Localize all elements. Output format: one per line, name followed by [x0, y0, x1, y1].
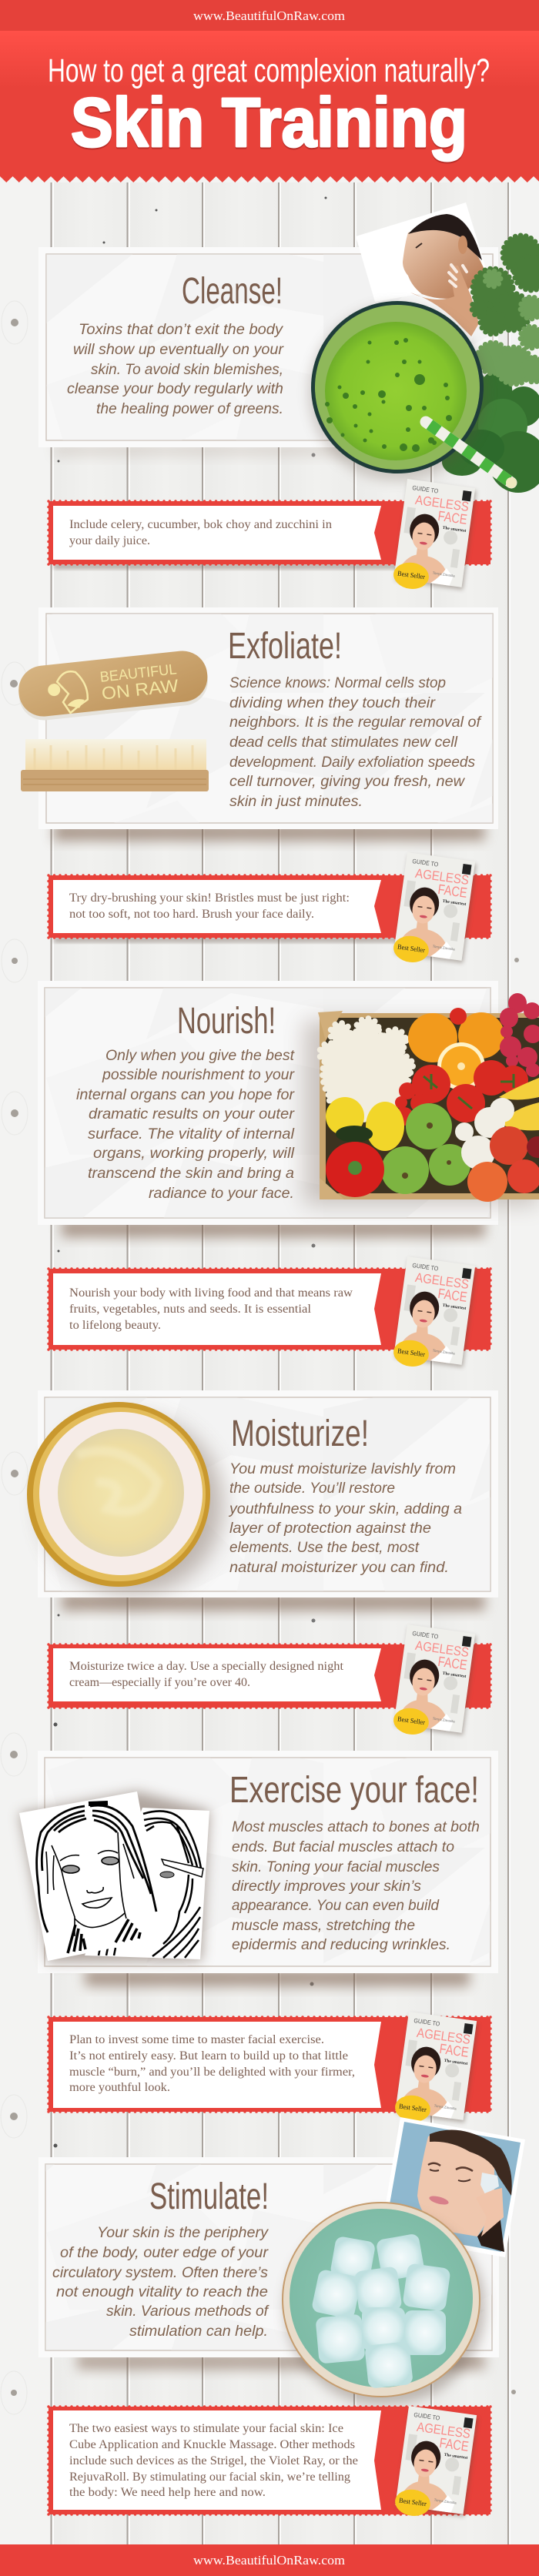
book cover: Tonya Zavasta — [432, 1349, 456, 1356]
tip text: Nourish your body with living food and that means raw — [69, 1286, 353, 1300]
tip text — [69, 1286, 353, 1332]
apples — [381, 1103, 470, 1194]
book cover: Best Seller — [399, 2102, 427, 2113]
body text: dead cells that stimulates new cell — [229, 734, 458, 751]
book cover: Best Seller — [397, 942, 426, 954]
tip text: Plan to invest some time to master facial exercise. — [69, 2033, 324, 2046]
book cover: AGELESS — [416, 2420, 471, 2441]
book cover — [392, 1624, 477, 1741]
book cover: AGELESS — [414, 866, 470, 888]
callout: stimulate tip — [49, 2406, 490, 2523]
book cover: GUIDE TO — [413, 2411, 440, 2422]
tip text — [69, 892, 350, 921]
body text: ends. But facial muscles attach to — [232, 1839, 454, 1855]
heading: Moisturize! — [231, 1413, 369, 1454]
book cover: The smartest — [442, 526, 467, 534]
tip text: include such devices as the Strigel, the Violet Ray, or the — [69, 2454, 358, 2467]
book cover: Tonya Zavasta — [434, 2498, 457, 2505]
body text: not enough vitality to reach the — [56, 2284, 268, 2300]
book cover: Best Seller — [397, 1347, 426, 1358]
tip text — [69, 2422, 358, 2499]
body text: skin in just minutes. — [229, 794, 363, 810]
body text: directly improves your skin’s — [232, 1878, 422, 1895]
panel: moisturize — [27, 1390, 498, 1611]
panel: exercise your face — [19, 1751, 498, 1986]
green smoothie glass with straw — [309, 301, 517, 488]
body text — [52, 2225, 270, 2340]
tip text: cream—especially if you’re over 40. — [69, 1676, 250, 1689]
body text: You must moisturize lavishly from — [229, 1461, 456, 1477]
tip text: Include celery, cucumber, bok choy and zucchini in — [69, 518, 332, 531]
callout: exfoliate tip — [49, 852, 490, 969]
tomatoes and strawberries — [395, 1008, 528, 1126]
body text — [228, 1461, 462, 1576]
oranges — [408, 1012, 504, 1090]
icon: brush side with bristles — [21, 739, 209, 791]
icon: wooden brush top with logo — [16, 648, 210, 723]
book cover: GUIDE TO — [412, 1630, 439, 1641]
book cover: The smartest — [442, 1303, 467, 1311]
body text — [232, 1819, 480, 1953]
top url bar — [0, 0, 539, 31]
tip text: Cube Application and Knuckle Massage. Other methods — [69, 2438, 355, 2451]
book cover: Best Seller — [397, 569, 426, 580]
book cover — [392, 479, 477, 596]
tip text: RejuvaRoll. By stimulating our facial skin, we’re telling — [69, 2471, 350, 2484]
book cover: Tonya Zavasta — [434, 2104, 457, 2111]
body text: the healing power of greens. — [96, 401, 283, 417]
tip text: to lifelong beauty. — [69, 1319, 161, 1332]
body text: transcend the skin and bring a — [88, 1166, 294, 1182]
book cover: FACE — [437, 882, 468, 901]
mushrooms — [455, 1098, 514, 1169]
body text: elements. Use the best, most — [229, 1540, 420, 1556]
body text: radiance to your face. — [149, 1186, 294, 1202]
body text: circulatory system. Often there’s — [52, 2265, 269, 2281]
book cover: AGELESS — [414, 1638, 470, 1660]
body text: stimulation can help. — [129, 2323, 268, 2340]
radishes — [500, 993, 539, 1077]
book cover: GUIDE TO — [412, 1262, 439, 1273]
body text: cell turnover, giving you fresh, new — [229, 774, 465, 790]
body text: internal organs can you hope for — [76, 1087, 295, 1103]
body text: Most muscles attach to bones at both — [232, 1819, 480, 1835]
nectarines — [467, 1126, 539, 1202]
book cover: The smartest — [442, 899, 467, 907]
callout: nourish tip — [49, 1256, 490, 1373]
book cover: FACE — [437, 508, 468, 527]
book cover: AGELESS — [414, 1270, 470, 1292]
tip text: the body: We need help here and now. — [69, 2486, 266, 2499]
bananas — [499, 1078, 539, 1130]
lemons — [326, 1097, 404, 1151]
heading: Cleanse! — [182, 271, 283, 312]
book cover: Tonya Zavasta — [432, 571, 456, 578]
book cover: The smartest — [442, 1671, 467, 1679]
callout: exercise tip — [49, 2012, 490, 2129]
icon: wooden brush top with logo: ON RAW — [101, 675, 179, 704]
tip text: Moisturize twice a day. Use a specially designed night — [69, 1660, 344, 1673]
body text — [229, 675, 482, 810]
book cover: Tonya Zavasta — [432, 1717, 456, 1724]
tip text: The two easiest ways to stimulate your facial skin: Ice — [69, 2422, 343, 2435]
book cover — [392, 852, 477, 969]
book cover: AGELESS — [414, 493, 470, 514]
tip text: not too soft, not too hard. Brush your face daily. — [69, 908, 314, 921]
body text: epidermis and reducing wrinkles. — [232, 1937, 450, 1953]
panel: nourish — [38, 981, 539, 1237]
tip text — [69, 2033, 355, 2094]
icon: cream jar — [27, 1402, 223, 1594]
book cover: FACE — [439, 2435, 470, 2454]
tip text: muscle “burn,” and you’ll be delighted with your firmer, — [69, 2066, 355, 2079]
body text: organs, working properly, will — [93, 1146, 295, 1162]
heading: Exercise your face! — [229, 1770, 479, 1811]
book cover: GUIDE TO — [412, 858, 439, 868]
body text: skin. Various methods of — [106, 2303, 270, 2320]
illustration: face exercise drawings — [19, 1791, 209, 1962]
body text: neighbors. It is the regular removal of — [229, 714, 482, 731]
main title: Skin Training — [71, 85, 467, 162]
callout: cleanse tip — [49, 479, 490, 596]
callout: moisturize tip — [49, 1624, 490, 1741]
cauliflower — [320, 1019, 413, 1119]
book cover: AGELESS — [416, 2026, 471, 2047]
back drawing card — [85, 1808, 209, 1959]
book cover — [392, 1256, 477, 1373]
body text: dividing when they touch their — [229, 695, 436, 711]
heading: Nourish! — [177, 1001, 276, 1042]
body text: appearance. You can even build — [232, 1898, 440, 1914]
body text: dramatic results on your outer — [89, 1106, 295, 1122]
body text: skin. To avoid skin blemishes, — [91, 362, 283, 378]
website url: www.BeautifulOnRaw.com — [193, 2553, 345, 2568]
peppers — [326, 1126, 384, 1197]
tip text: Try dry-brushing your skin! Bristles must be just right: — [69, 892, 350, 905]
body text: natural moisturizer you can find. — [229, 1560, 449, 1576]
panel: cleanse — [38, 202, 539, 493]
book cover: FACE — [437, 1654, 468, 1673]
header banner — [0, 31, 539, 182]
photo: woman with ice cube — [380, 2117, 525, 2257]
body text: will show up eventually on your — [73, 342, 284, 358]
heading: Exfoliate! — [228, 626, 342, 667]
book cover: FACE — [437, 1286, 468, 1305]
body text: Toxins that don’t exit the body — [79, 322, 284, 338]
tip text: fruits, vegetables, nuts and seeds. It is essential — [69, 1303, 312, 1316]
photo: woman touching face — [356, 202, 490, 336]
book cover: FACE — [439, 2041, 470, 2060]
tip text: It’s not entirely easy. But learn to build up to that little — [69, 2049, 348, 2062]
body text: of the body, outer edge of your — [60, 2245, 269, 2261]
website url: www.BeautifulOnRaw.com — [193, 8, 345, 23]
icon: wooden brush top with logo: BEAUTIFUL — [99, 661, 177, 686]
front drawing card — [19, 1791, 164, 1961]
book cover: The smartest — [444, 2453, 468, 2461]
body text: development. Daily exfoliation speeds — [229, 754, 475, 771]
tip text: more youthful look. — [69, 2081, 170, 2094]
body text: possible nourishment to your — [102, 1067, 295, 1083]
main title: Skin Training — [71, 86, 467, 163]
body text: Science knows: Normal cells stop — [229, 675, 446, 691]
body text: layer of protection against the — [229, 1521, 431, 1537]
heading: Stimulate! — [149, 2176, 269, 2217]
book cover — [393, 2012, 478, 2129]
tip text — [69, 1660, 344, 1689]
panel: exfoliate — [16, 607, 498, 841]
body text: muscle mass, stretching the — [232, 1918, 415, 1934]
body text: Only when you give the best — [105, 1048, 295, 1064]
body text: Your skin is the periphery — [97, 2225, 270, 2241]
tip text — [69, 518, 332, 547]
book cover: Best Seller — [397, 1715, 426, 1726]
body text — [76, 1048, 295, 1202]
tip text: your daily juice. — [69, 534, 150, 547]
book cover: GUIDE TO — [413, 2017, 440, 2028]
body text: cleanse your body regularly with — [67, 381, 283, 397]
crate of fruit and vegetables — [304, 993, 539, 1205]
kale and spinach leaves — [442, 236, 539, 493]
panel: stimulate — [38, 2117, 525, 2405]
icon: bowl of ice cubes — [283, 2203, 485, 2405]
body text: youthfulness to your skin, adding a — [228, 1501, 462, 1517]
body text: surface. The vitality of internal — [88, 1126, 295, 1142]
book cover: GUIDE TO — [412, 484, 439, 495]
body text — [67, 322, 284, 417]
body text: skin. Toning your facial muscles — [232, 1859, 440, 1875]
book cover: Best Seller — [399, 2496, 427, 2507]
book cover: Tonya Zavasta — [432, 945, 456, 952]
footer bar — [0, 2544, 539, 2576]
book cover: The smartest — [444, 2059, 468, 2066]
body text: the outside. You’ll restore — [229, 1480, 395, 1497]
book cover — [393, 2406, 478, 2523]
